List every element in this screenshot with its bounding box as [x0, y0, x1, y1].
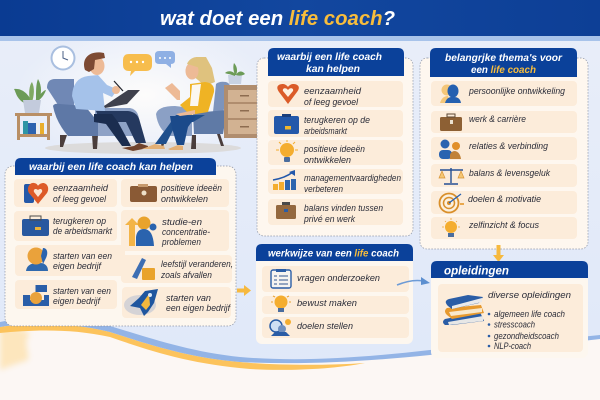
item: doelen & motivatie	[468, 194, 541, 204]
item: eenzaamheid	[304, 86, 362, 96]
item	[262, 266, 409, 292]
item	[268, 140, 403, 165]
panel: opleidingen	[431, 261, 588, 358]
item: eenzaamheid	[14, 179, 117, 207]
item: werk & carrière	[469, 114, 526, 124]
item: positieve ideeen	[121, 179, 229, 207]
item: vragen onderzoeken	[297, 273, 380, 283]
list: algemeen life coach	[494, 309, 565, 319]
man	[72, 52, 148, 151]
woman	[142, 57, 215, 150]
item	[431, 137, 577, 160]
item: ontwikkelen	[304, 155, 351, 165]
item: privé en werk	[303, 214, 356, 224]
item	[431, 111, 577, 133]
item: starten van een eigen bedrijf rocket: starten van	[166, 293, 211, 303]
left armchair	[47, 79, 139, 149]
item: leefstijl	[121, 255, 233, 283]
item: starten van een eigen bedrijf rocket	[122, 287, 232, 318]
item: starten bedrijf 1: eigen bedrijf	[53, 261, 103, 271]
item: terugkeren: de arbeidsmarkt	[53, 226, 113, 236]
item: zelfinzicht & focus	[468, 220, 540, 230]
inner card	[438, 284, 583, 352]
heading: waarbij een life coach kan helpen	[29, 162, 193, 173]
item: managementvaardigheden	[304, 173, 401, 183]
heading: opleidingen	[444, 266, 509, 278]
icon: books	[443, 295, 484, 325]
item: persoonlijke ontwikkeling	[468, 86, 565, 96]
item: eenzaamheid: of leeg gevoel	[53, 194, 107, 204]
panel: waarbij een life coach kan helpen (middle)	[257, 48, 413, 236]
item	[268, 199, 403, 225]
item: positieve ideeën	[303, 144, 365, 154]
item	[431, 164, 577, 187]
inner card: diverse opleidingen	[488, 290, 571, 301]
item: starten van een eigen bedrijf rocket: een eigen bedrijf	[166, 303, 232, 313]
item	[268, 110, 403, 137]
illustration: coaching session	[14, 46, 265, 154]
item: starten bedrijf 2: eigen bedrijf	[53, 296, 102, 306]
item	[431, 217, 577, 239]
panel: belangrijke thema's	[420, 48, 588, 249]
title banner	[0, 0, 600, 41]
woman's armchair	[156, 82, 230, 149]
heading	[268, 48, 404, 76]
item: balans vinden tussen	[304, 203, 383, 213]
speech bubbles	[123, 51, 175, 76]
heading	[430, 48, 577, 77]
heading	[256, 244, 413, 261]
item: leefstijl: zoals afvallen	[160, 270, 212, 280]
item: starten bedrijf 2: starten van een	[53, 286, 111, 296]
item: bewust maken	[297, 298, 357, 308]
item: verbeteren	[304, 184, 343, 194]
item	[262, 296, 409, 314]
item: leefstijl: leefstijl veranderen,	[161, 259, 233, 269]
title: wat doet een life coach?	[160, 7, 395, 30]
heading: een life coach	[471, 65, 536, 76]
item: of leeg gevoel	[304, 97, 359, 107]
item	[262, 317, 409, 338]
item: starten bedrijf 1: starten van een	[53, 251, 112, 261]
heading	[431, 261, 588, 278]
heading: waarbij een life coach	[277, 52, 382, 63]
heading: belangrjke thema's voor	[445, 53, 563, 64]
item: balans & levensgeluk	[469, 168, 551, 178]
list: NLP-coach	[494, 341, 531, 351]
item: studie: problemen	[161, 237, 201, 247]
arrow: to opleidingen	[397, 277, 430, 285]
heading: kan helpen	[306, 64, 360, 75]
cabinet with plant	[224, 63, 265, 138]
heading	[15, 158, 216, 175]
item	[431, 81, 577, 106]
panel: waarbij een life coach kan helpen (left)	[5, 158, 236, 326]
item: terugkeren op de	[304, 115, 370, 125]
list	[488, 309, 565, 351]
item: studie	[121, 210, 229, 251]
list: gezondheidscoach	[494, 331, 559, 341]
item: positieve ideeen: positieve ideeën	[160, 183, 222, 193]
item: terugkeren	[14, 211, 117, 241]
item: starten bedrijf 2	[15, 280, 117, 309]
list: stresscoach	[494, 320, 535, 330]
item: doelen stellen	[297, 321, 353, 331]
item	[431, 191, 577, 214]
item	[268, 81, 403, 107]
item: studie: concentratie-	[162, 227, 210, 237]
icon: wall clock	[50, 46, 76, 70]
item: relaties & verbinding	[469, 141, 548, 151]
heading: werkwijze van een life coach	[268, 248, 399, 260]
panel: werkwijze	[256, 244, 413, 344]
item: starten bedrijf 1	[15, 245, 125, 276]
item: eenzaamheid: eenzaamheid	[53, 183, 109, 193]
decorative wave	[0, 318, 600, 370]
item: positieve ideeen: ontwikkelen	[161, 194, 208, 204]
arrow: left panel to werkwijze	[237, 285, 251, 296]
shelf with plant	[14, 79, 52, 140]
arrow: down to opleidingen	[493, 245, 504, 262]
item: studie: studie-en	[162, 217, 202, 227]
item	[268, 169, 403, 194]
item: arbeidsmarkt	[304, 126, 347, 136]
item: terugkeren: terugkeren op	[53, 216, 106, 226]
